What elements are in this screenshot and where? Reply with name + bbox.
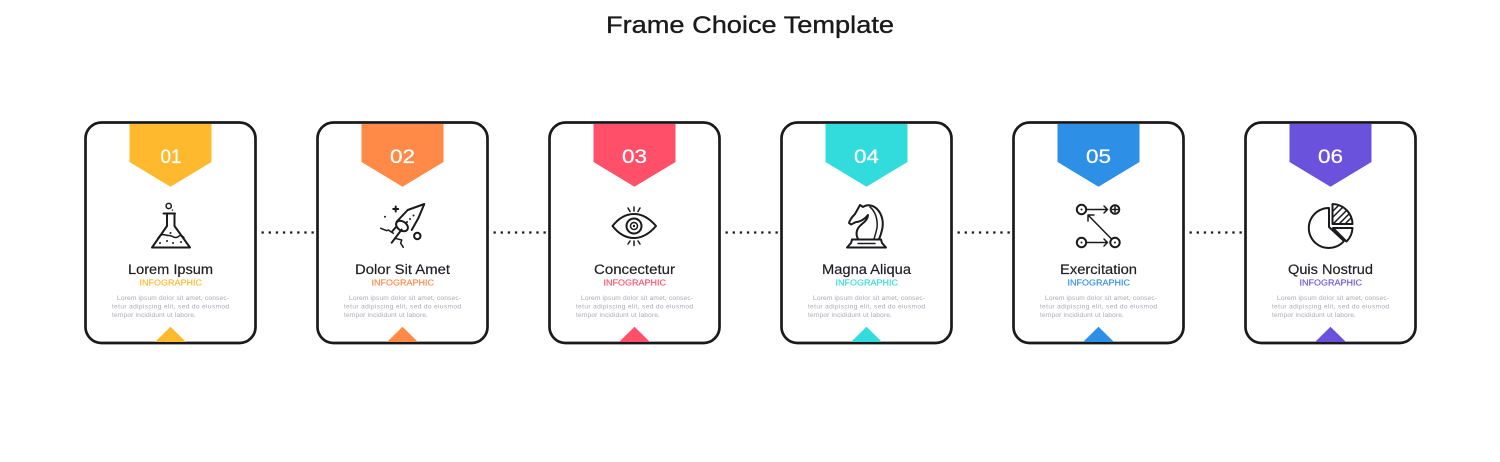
card heading 01: Lorem Ipsum bbox=[128, 262, 213, 277]
card body text 03: tempor incididunt ut labore. bbox=[576, 312, 660, 319]
panel: card 03 bbox=[550, 122, 720, 343]
card body text 01 bbox=[112, 295, 229, 319]
card heading 06: Quis Nostrud bbox=[1288, 262, 1373, 277]
card body text 06: tetur adipiscing elit, sed do eiusmod bbox=[1272, 304, 1389, 310]
banner 03 bbox=[594, 124, 676, 187]
card heading 03: Concectetur bbox=[594, 262, 676, 277]
bottom marker 04 bbox=[851, 327, 882, 342]
banner 05 bbox=[1058, 124, 1140, 187]
card body text 05 bbox=[1040, 295, 1157, 319]
card body text 02: tempor incididunt ut labore. bbox=[344, 312, 428, 319]
bottom marker 02 bbox=[387, 327, 418, 342]
icon: rocket bbox=[381, 204, 424, 247]
card label 01: INFOGRAPHIC bbox=[140, 278, 202, 288]
card body text 05: tempor incididunt ut labore. bbox=[1040, 312, 1124, 319]
number 03: 03 bbox=[622, 146, 647, 168]
panel: card 02 bbox=[318, 122, 488, 343]
number 02: 02 bbox=[390, 146, 415, 168]
icon: eye bbox=[612, 207, 656, 246]
icon: pie chart bbox=[1309, 202, 1358, 248]
card label 06: INFOGRAPHIC bbox=[1300, 278, 1362, 288]
banner 04 bbox=[826, 124, 908, 187]
card label 04: INFOGRAPHIC bbox=[836, 278, 898, 288]
card heading 05: Exercitation bbox=[1060, 262, 1137, 277]
connector 2-3 bbox=[494, 231, 546, 234]
panel: card 04 bbox=[782, 122, 952, 343]
number 04: 04 bbox=[854, 146, 879, 168]
card body text 01: tempor incididunt ut labore. bbox=[112, 312, 196, 319]
card body text 02: Lorem ipsum dolor sit amet, consec- bbox=[349, 295, 461, 302]
panel: card 06 bbox=[1246, 122, 1416, 343]
card body text 04: Lorem ipsum dolor sit amet, consec- bbox=[813, 295, 925, 302]
card body text 01: Lorem ipsum dolor sit amet, consec- bbox=[117, 295, 229, 302]
card heading 04: Magna Aliqua bbox=[822, 262, 912, 277]
banner 01 bbox=[130, 124, 212, 187]
bottom marker 03 bbox=[619, 327, 650, 342]
card heading 02: Dolor Sit Amet bbox=[355, 262, 450, 277]
connector 3-4 bbox=[726, 231, 778, 234]
card body text 03 bbox=[576, 295, 693, 319]
number 06: 06 bbox=[1318, 146, 1343, 168]
card body text 04: tempor incididunt ut labore. bbox=[808, 312, 892, 319]
panel: card 01 bbox=[86, 122, 256, 343]
card label 03: INFOGRAPHIC bbox=[604, 278, 666, 288]
title: Frame Choice Template bbox=[606, 12, 894, 39]
card body text 04 bbox=[808, 295, 925, 319]
card label 05: INFOGRAPHIC bbox=[1068, 278, 1130, 288]
card body text 06 bbox=[1272, 295, 1389, 319]
icon: process nodes bbox=[1077, 205, 1120, 247]
icon: flask bbox=[152, 203, 190, 248]
panel: card 05 bbox=[1014, 122, 1184, 343]
bottom marker 01 bbox=[155, 327, 186, 342]
card body text 02 bbox=[344, 295, 461, 319]
bottom marker 06 bbox=[1315, 327, 1346, 342]
connector 4-5 bbox=[958, 231, 1010, 234]
card body text 04: tetur adipiscing elit, sed do eiusmod bbox=[808, 304, 925, 310]
connector 1-2 bbox=[262, 231, 314, 234]
card label 02: INFOGRAPHIC bbox=[372, 278, 434, 288]
number 05: 05 bbox=[1086, 146, 1111, 168]
card body text 03: Lorem ipsum dolor sit amet, consec- bbox=[581, 295, 693, 302]
card body text 06: Lorem ipsum dolor sit amet, consec- bbox=[1277, 295, 1389, 302]
banner 06 bbox=[1290, 124, 1372, 187]
connector 5-6 bbox=[1190, 231, 1242, 234]
banner 02 bbox=[362, 124, 444, 187]
card body text 05: Lorem ipsum dolor sit amet, consec- bbox=[1045, 295, 1157, 302]
card body text 03: tetur adipiscing elit, sed do eiusmod bbox=[576, 304, 693, 310]
card body text 05: tetur adipiscing elit, sed do eiusmod bbox=[1040, 304, 1157, 310]
card body text 02: tetur adipiscing elit, sed do eiusmod bbox=[344, 304, 461, 310]
number 01: 01 bbox=[160, 146, 182, 168]
bottom marker 05 bbox=[1083, 327, 1114, 342]
icon: chess knight bbox=[847, 205, 886, 248]
card body text 01: tetur adipiscing elit, sed do eiusmod bbox=[112, 304, 229, 310]
card body text 06: tempor incididunt ut labore. bbox=[1272, 312, 1356, 319]
